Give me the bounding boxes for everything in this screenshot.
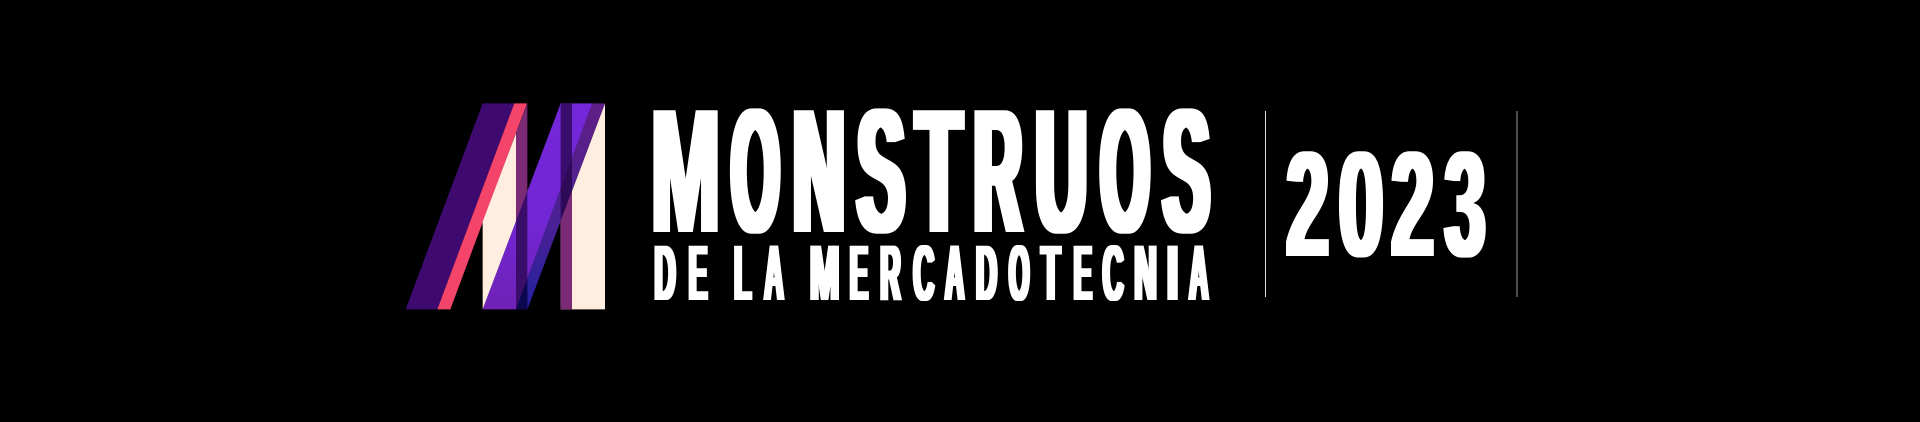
subheading: DE LA MERCADOTECNIA: L	[734, 231, 751, 317]
heading: MONSTRUOS: T	[916, 72, 962, 270]
heading: MONSTRUOS: O	[731, 73, 779, 271]
heading: MONSTRUOS: N	[793, 72, 845, 270]
year: 2023: 3	[1445, 121, 1485, 289]
heading: MONSTRUOS: S	[857, 72, 905, 270]
heading: MONSTRUOS: U	[1036, 72, 1087, 270]
right divider line	[1516, 111, 1518, 297]
year: 2023	[1286, 121, 1485, 289]
subheading: DE LA MERCADOTECNIA: E	[689, 231, 707, 317]
subheading: DE LA MERCADOTECNIA: N	[1134, 229, 1157, 317]
subheading: DE LA MERCADOTECNIA: R	[880, 231, 901, 317]
subheading: DE LA MERCADOTECNIA: A	[1189, 230, 1208, 317]
left divider line	[1265, 111, 1266, 297]
subheading: DE LA MERCADOTECNIA: C	[1103, 230, 1123, 317]
heading: MONSTRUOS: M	[651, 73, 720, 270]
heading: MONSTRUOS	[651, 72, 1210, 271]
subheading: DE LA MERCADOTECNIA: C	[913, 230, 934, 317]
heading: MONSTRUOS: R	[974, 73, 1022, 270]
heading: MONSTRUOS: S	[1163, 72, 1210, 270]
subheading: DE LA MERCADOTECNIA: D	[976, 228, 997, 317]
subheading: DE LA MERCADOTECNIA: D	[655, 228, 676, 317]
subheading: DE LA MERCADOTECNIA: A	[764, 230, 783, 317]
year: 2023: 2	[1391, 121, 1434, 289]
subheading: DE LA MERCADOTECNIA: O	[1009, 230, 1029, 317]
subheading: DE LA MERCADOTECNIA: I	[1166, 229, 1179, 317]
year: 2023: 0	[1339, 121, 1383, 288]
subheading: DE LA MERCADOTECNIA: E	[1074, 231, 1092, 317]
logo: stylised M	[406, 103, 605, 309]
heading: MONSTRUOS: O	[1101, 73, 1149, 271]
subheading: DE LA MERCADOTECNIA: E	[850, 231, 868, 317]
subheading: DE LA MERCADOTECNIA: M	[810, 229, 839, 317]
subheading: DE LA MERCADOTECNIA: T	[1041, 229, 1060, 317]
subheading: DE LA MERCADOTECNIA	[655, 228, 1208, 317]
year: 2023: 2	[1286, 121, 1329, 289]
subheading: DE LA MERCADOTECNIA: A	[945, 230, 964, 317]
